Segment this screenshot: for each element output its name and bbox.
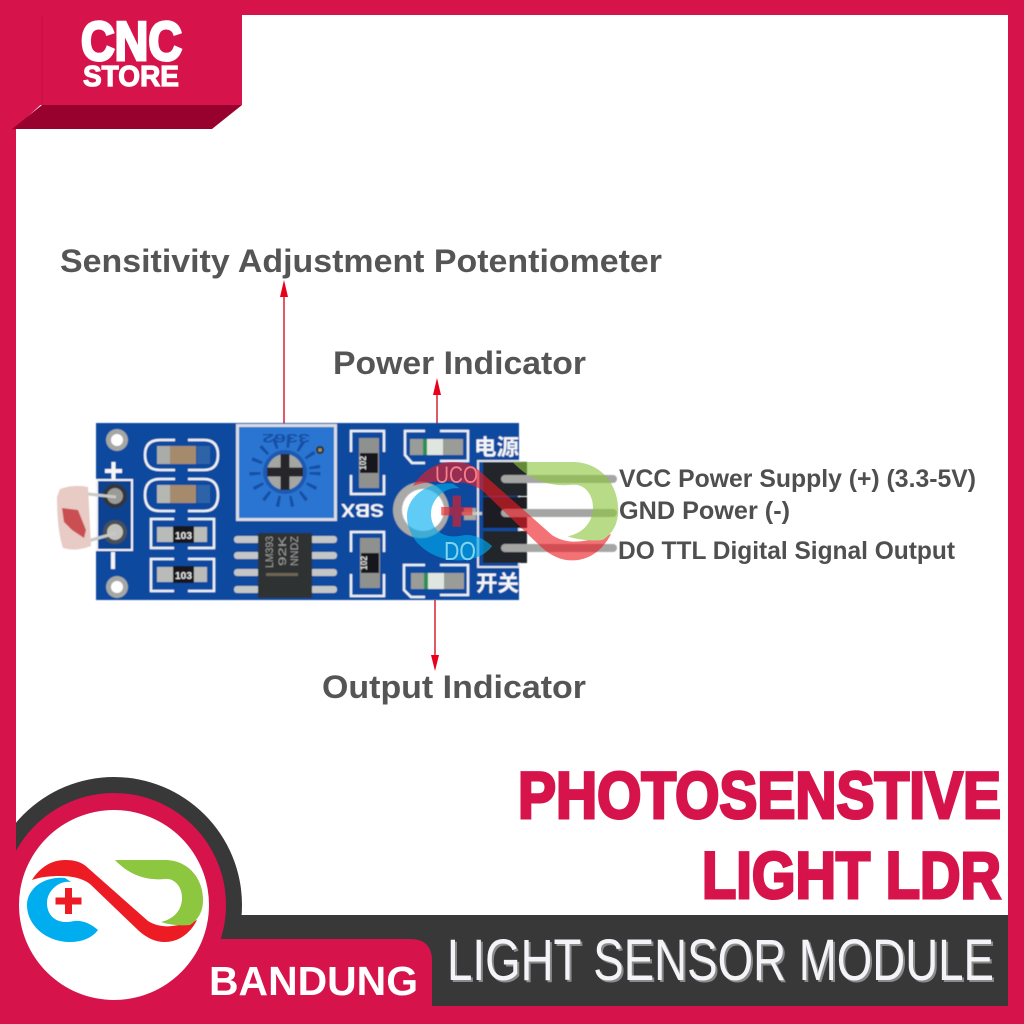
silkscreen: switch label: 开关 [476,571,519,596]
IC chip LM393 [234,533,337,598]
resistors 103 [157,526,207,583]
resistors 102: 102 [359,556,369,570]
watermark: DO text: DO [444,536,476,566]
capacitor outlines [145,440,218,591]
label: GND pin: GND Power (-) [619,497,790,525]
logo: CNC Store tab: STORE [83,61,179,93]
silkscreen: power label: 电源 [474,435,519,460]
panel: crimson badge with Bandung tab [0,793,1024,1024]
resistors 103: 103 [175,531,192,542]
watermark: UCO text: UCO [435,462,478,489]
label: output indicator: Output Indicator [322,669,586,705]
mounting hole: top left [106,429,128,451]
IC chip LM393: NNDZ [289,536,301,566]
watermark: infinity logo overlay [407,462,618,560]
logo: infinity mark [27,860,203,942]
badge: white logo circle [19,810,209,1000]
IC chip LM393: 92K [277,535,289,566]
arrow: to power indicator label [433,378,441,424]
board substrate [96,423,519,600]
power LED [405,431,468,463]
resistors 103: 103 [175,571,192,582]
potentiometer: 3362 [261,431,310,445]
potentiometer [236,424,337,521]
label: DO pin: DO TTL Digital Signal Output [618,537,956,565]
resistors 102: 102 [358,456,368,470]
label: sensitivity adjustment potentiometer: Sensitivity Adjustment Potentiometer [60,243,662,279]
LDR terminal pads [88,480,132,550]
silkscreen: SBX: SBX [341,500,384,520]
label: VCC pin: VCC Power Supply (+) (3.3-5V) [619,465,976,493]
pin header [478,461,613,567]
label: power indicator: Power Indicator [333,345,586,381]
photo: LDR sensor module board [57,423,613,600]
capacitors [157,446,210,503]
logo: CNC Store tab [0,0,242,129]
logo: CNC Store tab: CNC [81,10,182,72]
arrow: to output indicator label [431,600,439,671]
arrow: to potentiometer label [280,280,288,425]
resistors 102 outlines [351,431,384,596]
text: Bandung: BANDUNG [209,958,418,1004]
mounting hole: bottom left [106,576,128,598]
silkscreen: plus and minus marks [105,462,122,569]
diode [462,508,482,520]
panel: dark subtitle band [0,777,1008,1024]
output LED [404,565,468,597]
LDR photoresistor [57,486,91,550]
resistors 102 [358,438,380,588]
mounting hole: large [393,482,449,538]
IC chip LM393: LM393 [264,536,276,568]
